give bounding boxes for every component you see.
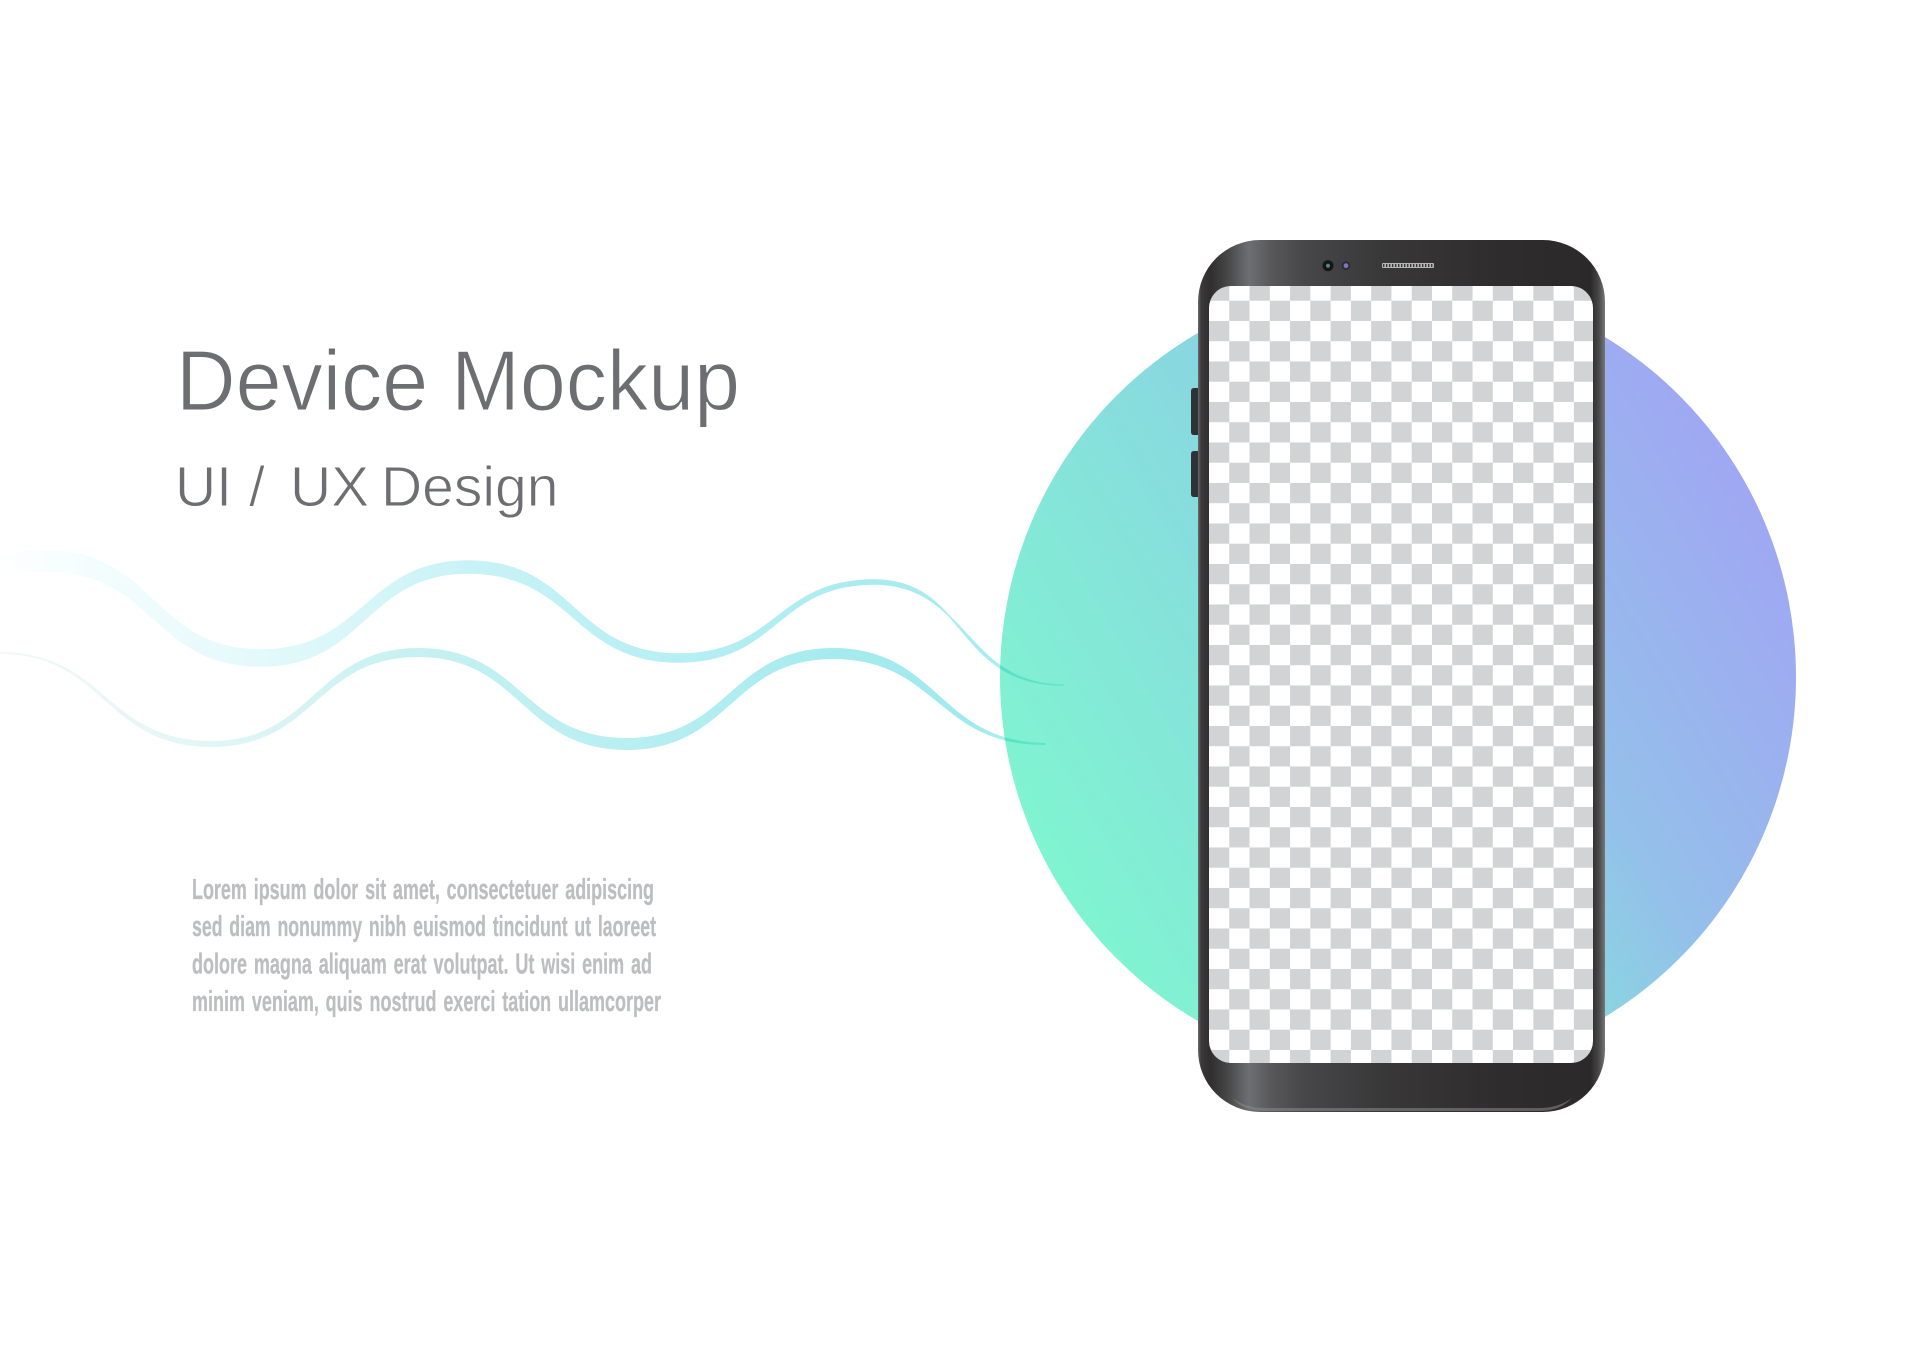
- subtitle: Design: [381, 455, 558, 519]
- body text: dolore magna aliquam erat volutpat. Ut wisi enim ad: [192, 948, 652, 980]
- subtitle: UI: [175, 455, 232, 519]
- subtitle: /: [249, 455, 265, 519]
- background circle: [1000, 279, 1796, 1075]
- screen checkerboard: [1209, 286, 1593, 1063]
- title: Device Mockup: [176, 334, 740, 429]
- upper wave: [0, 551, 1063, 685]
- subtitle: UX: [290, 455, 369, 519]
- bottom bevel highlight: [1232, 1098, 1572, 1111]
- speaker grille: [1382, 263, 1434, 268]
- body text: sed diam nonummy nibh euismod tincidunt ut laoreet: [192, 911, 656, 943]
- phone mockup: [1191, 240, 1605, 1112]
- body text: [192, 874, 661, 1018]
- side buttons: [1191, 388, 1199, 497]
- wave ribbons: [0, 551, 1063, 749]
- front camera: [1322, 260, 1334, 271]
- phone body: [1198, 240, 1605, 1112]
- body text: minim veniam, quis nostrud exerci tation ullamcorper: [192, 986, 661, 1018]
- lower wave: [0, 649, 1045, 749]
- body text: Lorem ipsum dolor sit amet, consectetuer adipiscing: [192, 874, 654, 906]
- sensor: [1342, 261, 1350, 270]
